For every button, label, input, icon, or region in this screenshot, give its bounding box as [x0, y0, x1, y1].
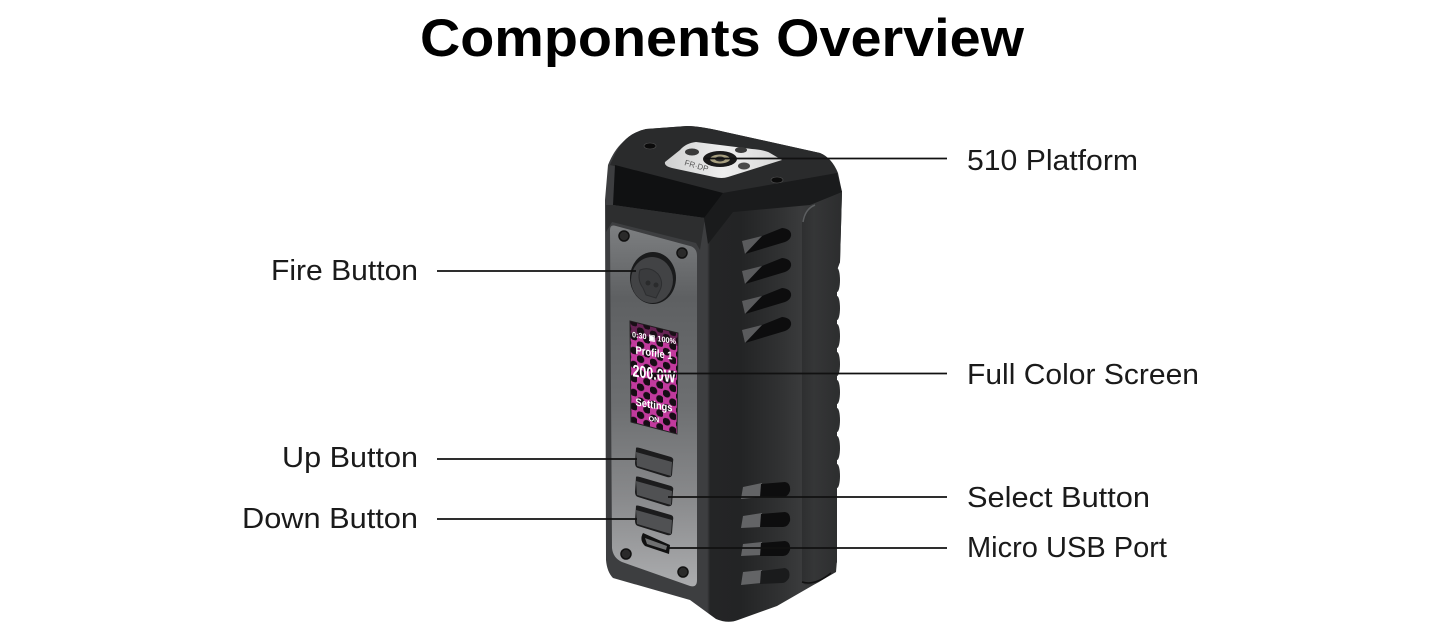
panel screws [619, 231, 688, 577]
lower vents [741, 482, 790, 585]
full color screen: ON [649, 416, 659, 424]
callout: Micro USB Port: Micro USB Port [967, 532, 1167, 564]
callout: Down Button: Down Button [242, 503, 418, 535]
device: box mod [605, 126, 842, 622]
micro usb port [641, 533, 670, 554]
top screws [644, 143, 783, 183]
full color screen: 200.0W [632, 361, 676, 387]
upper vents [742, 228, 791, 343]
device body [605, 126, 842, 622]
front panel [610, 226, 697, 586]
callout: Full Color Screen: Full Color Screen [967, 359, 1199, 391]
icon: skull [639, 269, 662, 298]
left chamfer [606, 205, 705, 250]
510 platform plate [665, 142, 782, 178]
up button [635, 448, 673, 477]
title: Components Overview [420, 9, 1025, 68]
full color screen: Profile 1 [635, 345, 672, 363]
callout: 510 Platform: 510 Platform [967, 145, 1138, 177]
right chamfer [704, 173, 842, 244]
callout: Fire Button: Fire Button [271, 255, 418, 287]
full color screen [630, 321, 678, 434]
select button [635, 476, 673, 506]
front dark band [613, 165, 723, 218]
510 platform plate: FR·DP [683, 158, 709, 174]
full color screen: 0:30 ▣ 100% [632, 330, 676, 346]
right edge ridges [834, 268, 840, 488]
down button [635, 506, 673, 535]
top cap [610, 126, 837, 193]
full color screen: Settings [635, 397, 672, 415]
right grip [802, 192, 842, 585]
callout: Select Button: Select Button [967, 482, 1150, 514]
callout: Up Button: Up Button [282, 442, 418, 474]
fire button [630, 252, 676, 304]
